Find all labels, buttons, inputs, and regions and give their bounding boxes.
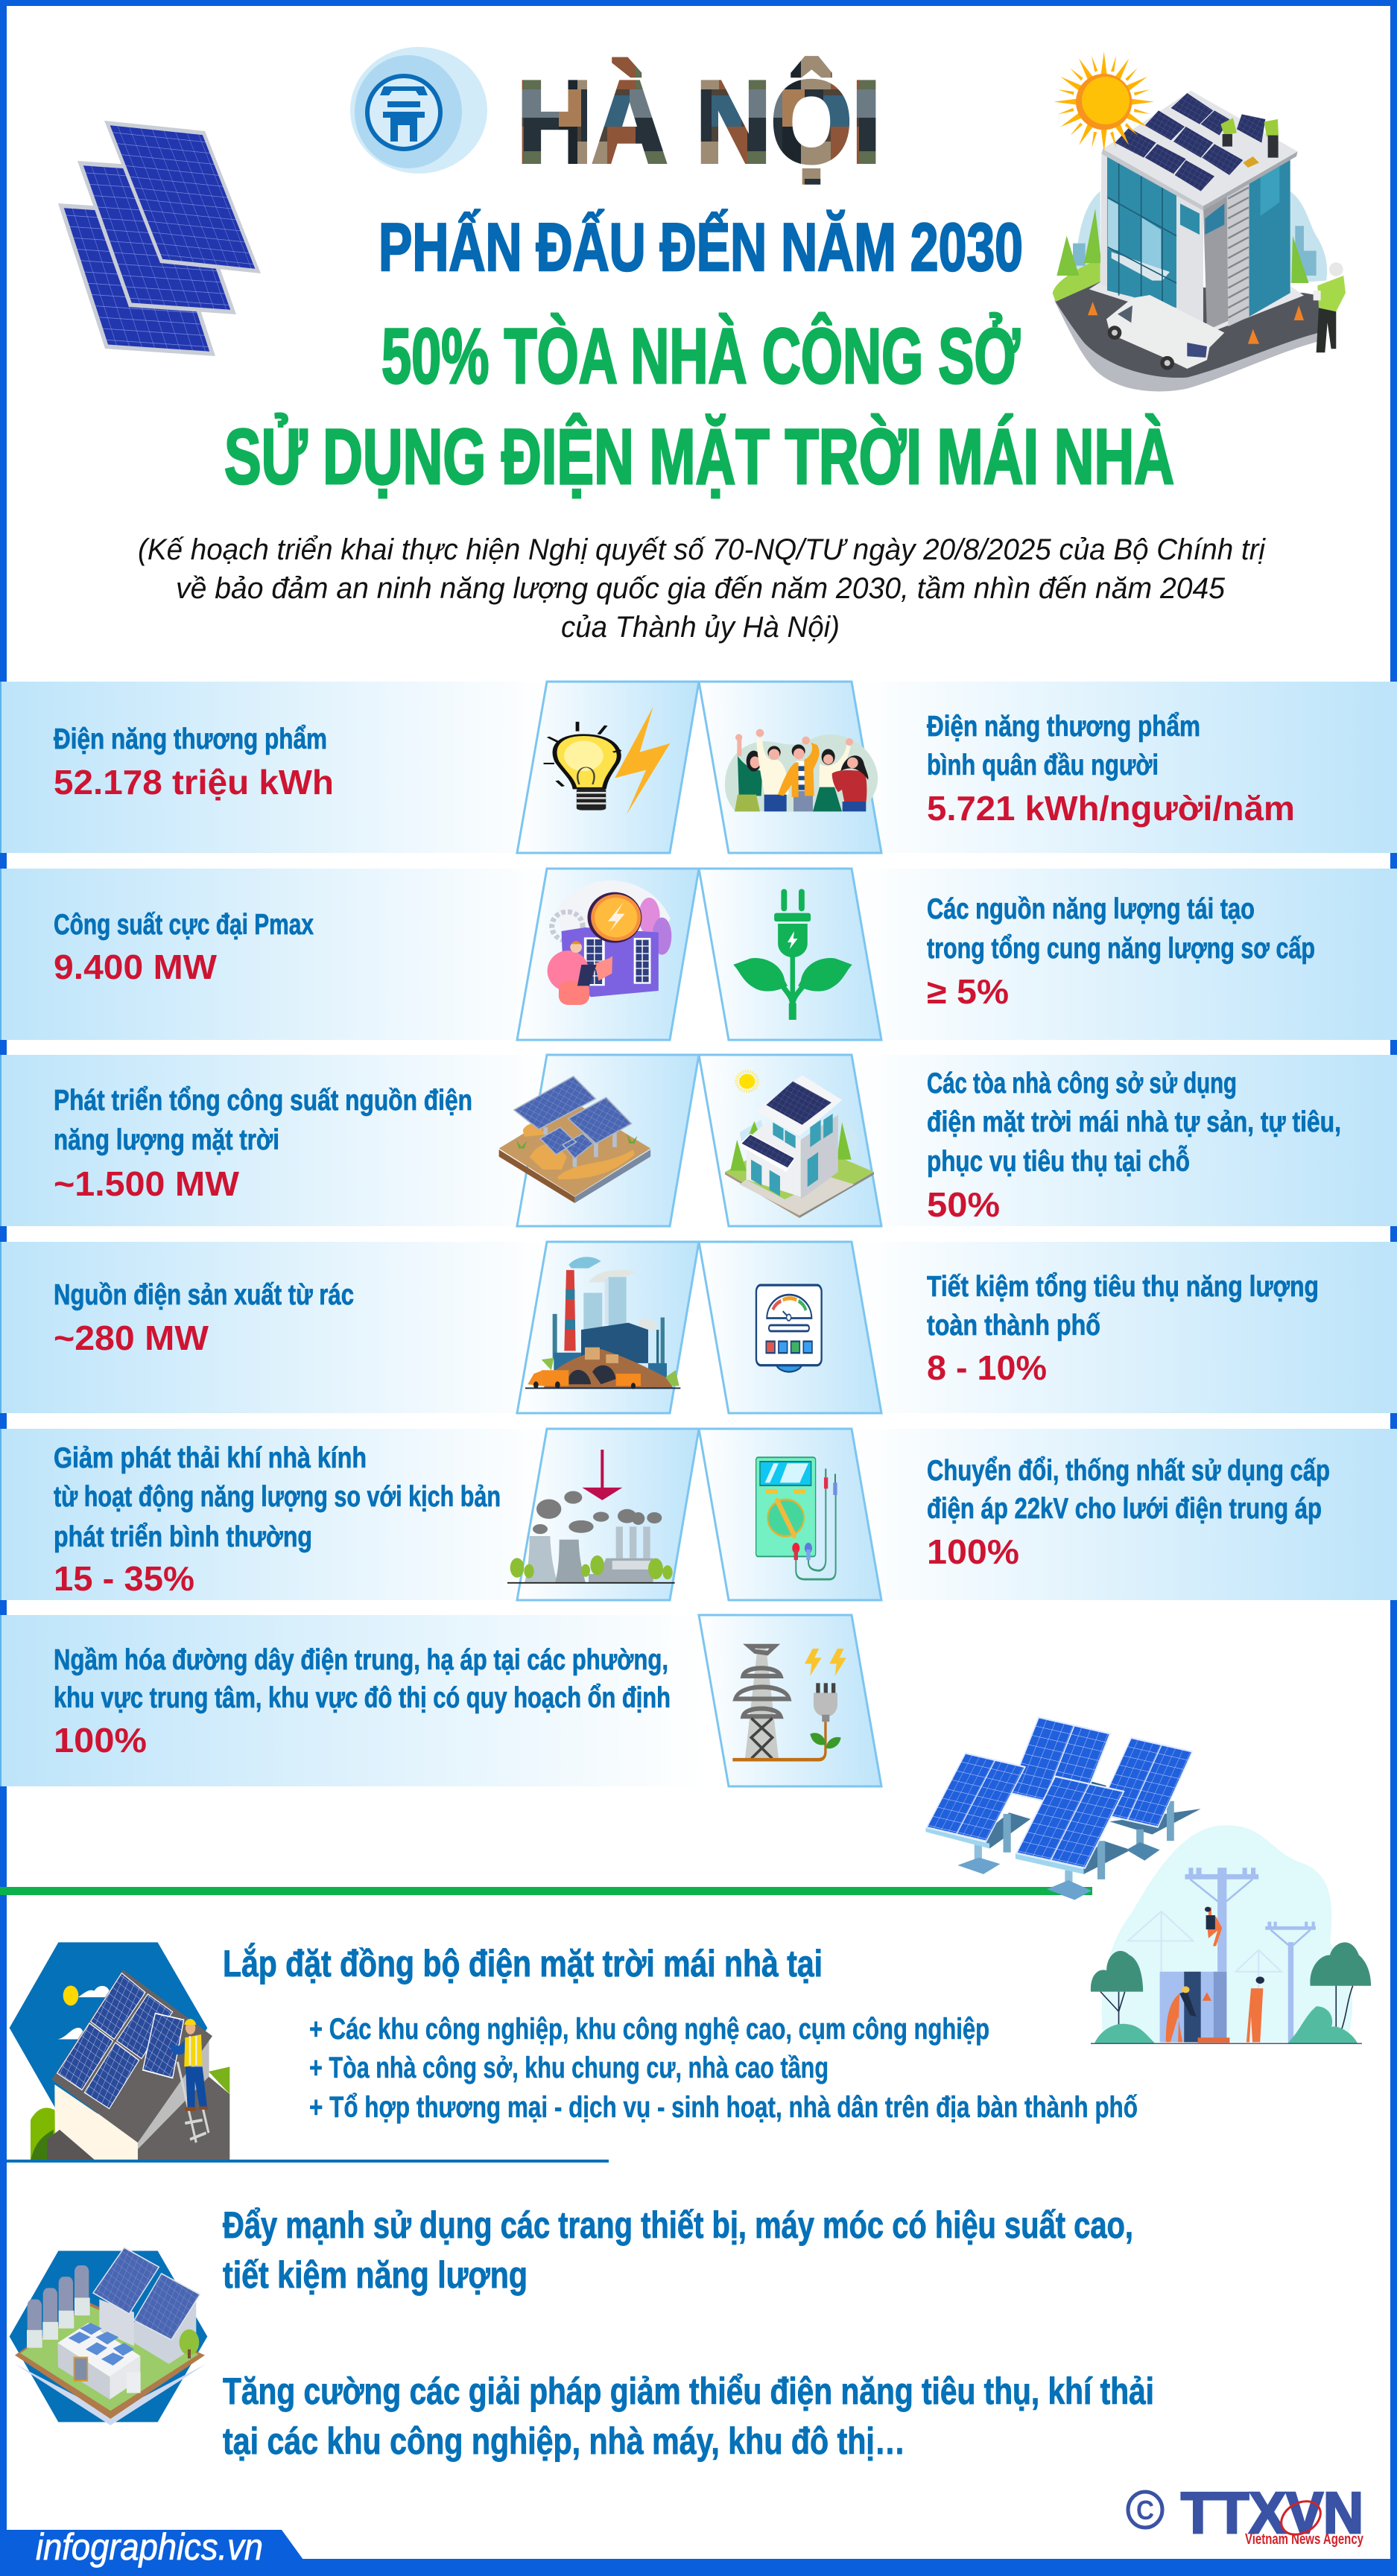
title: Hà Nội: HÀ NỘI [517, 57, 881, 186]
label: giảm phát thải khí nhà kính: 15 - 35% [54, 1559, 194, 1598]
block: đẩy mạnh sử dụng thiết bị: tiết kiệm năng lượng [223, 2254, 528, 2296]
row 6 icon panel [699, 1615, 881, 1786]
icon: solar farm on desert block [499, 1076, 650, 1203]
block: đẩy mạnh sử dụng thiết bị [223, 2204, 1133, 2296]
icon: light bulb and lightning [544, 706, 670, 815]
label: giảm phát thải khí nhà kính: Giảm phát thải khí nhà kính [54, 1442, 367, 1474]
row 2 right panel [699, 869, 1397, 1040]
label: tiết kiệm tổng tiêu thụ năng lượng: toàn thành phố [927, 1310, 1100, 1342]
icon: multimeter [756, 1457, 837, 1579]
label: tiết kiệm tổng tiêu thụ năng lượng: Tiết kiệm tổng tiêu thụ năng lượng [927, 1271, 1319, 1303]
van [1106, 295, 1224, 370]
block: lắp đặt đồng bộ: + Các khu công nghiệp, khu công nghệ cao, cụm công nghiệp [309, 2013, 989, 2046]
logo: TTXVN: TTXVN [1181, 2480, 1363, 2545]
icon: factory emissions with down arrow [507, 1450, 675, 1583]
cones [1088, 302, 1304, 344]
row 2 left panel [0, 869, 699, 1040]
left glass facade [1100, 151, 1203, 324]
block: lắp đặt đồng bộ: + Tòa nhà công sở, khu chung cư, nhà cao tầng [309, 2052, 829, 2084]
label: bình quân đầu người: Điện năng thương phẩm [927, 711, 1200, 743]
label: giảm phát thải khí nhà kính: phát triển bình thường [54, 1521, 312, 1553]
label: chuyển đổi cấp điện áp 22kV [927, 1455, 1330, 1571]
label: ngầm hóa đường dây: Ngầm hóa đường dây điện trung, hạ áp tại các phường, [54, 1644, 668, 1676]
sun [1054, 51, 1154, 152]
row 4 right panel [699, 1242, 1397, 1413]
icon: stacked solar panels [58, 121, 261, 356]
person 3 [778, 737, 820, 811]
label: phát triển nguồn điện mặt trời: năng lượng mặt trời [54, 1124, 279, 1156]
icon: Hanoi emblem [350, 47, 487, 174]
person 1 [735, 734, 762, 811]
label: phát triển nguồn điện mặt trời [54, 1085, 472, 1203]
logo: TTXVN: C [1136, 2495, 1154, 2525]
icon: group of people [725, 729, 878, 811]
label: bình quân đầu người [927, 711, 1295, 828]
subtitle text: về bảo đảm an ninh năng lượng quốc gia đến năm 2030, tầm nhìn đến năm 2045 [176, 572, 1226, 605]
block: lắp đặt đồng bộ: Lắp đặt đồng bộ điện mặt trời mái nhà tại [223, 1943, 823, 1985]
label: nguồn điện sản xuất từ rác [54, 1279, 354, 1357]
footer tab [0, 2530, 303, 2576]
label: ngầm hóa đường dây: khu vực trung tâm, khu vực đô thị có quy hoạch ổn định [54, 1682, 671, 1714]
label: điện năng thương phẩm [54, 723, 334, 802]
subtitle text [138, 533, 1266, 644]
row 6 left panel [0, 1615, 717, 1786]
label: tiết kiệm tổng tiêu thụ năng lượng: 8 - 10% [927, 1348, 1047, 1387]
section divider: blue [7, 2160, 609, 2163]
subtitle text: của Thành ủy Hà Nội) [561, 611, 840, 644]
label: nguồn năng lượng tái tạo [927, 893, 1315, 1011]
label: nguồn điện sản xuất từ rác: ~280 MW [54, 1319, 209, 1357]
row 1 left panel [0, 682, 699, 853]
row 4 left panel [0, 1242, 699, 1413]
footer label: infographics.vn: infographics.vn [36, 2526, 263, 2568]
label: ngầm hóa đường dây [54, 1644, 671, 1760]
row 3 right panel [699, 1055, 1397, 1226]
row 3 left panel [0, 1055, 699, 1226]
label: bình quân đầu người: 5.721 kWh/người/năm [927, 789, 1295, 828]
label: nguồn năng lượng tái tạo: ≥ 5% [927, 972, 1009, 1011]
row 5 right panel [699, 1429, 1397, 1600]
label: chuyển đổi cấp điện áp 22kV: 100% [927, 1532, 1019, 1571]
icon: worker installing rooftop panels [10, 1942, 229, 2161]
heading: 50% tòa nhà công sở: 50% TÒA NHÀ CÔNG SỞ [381, 312, 1020, 400]
subtitle text: (Kế hoạch triển khai thực hiện Nghị quyết số 70-NQ/TƯ ngày 20/8/2025 của Bộ Chính trị [138, 533, 1266, 566]
label: phát triển nguồn điện mặt trời: ~1.500 MW [54, 1164, 240, 1203]
label: công suất cực đại Pmax: 9.400 MW [54, 948, 218, 986]
icon: plug and plant [733, 889, 852, 1020]
label: tòa nhà công sở sử dụng điện mặt trời: 50% [927, 1185, 1000, 1224]
label: tòa nhà công sở sử dụng điện mặt trời [927, 1067, 1341, 1224]
block: đẩy mạnh sử dụng thiết bị: Đẩy mạnh sử dụng các trang thiết bị, máy móc có hiệu suất cao, [223, 2204, 1133, 2246]
label: tòa nhà công sở sử dụng điện mặt trời: phục vụ tiêu thụ tại chỗ [927, 1145, 1190, 1178]
right facade [1203, 158, 1290, 330]
engineer [1314, 262, 1346, 352]
icon: engineer with power building [548, 881, 671, 1005]
block: tăng cường giải pháp: Tăng cường các giải pháp giảm thiểu điện năng tiêu thụ, khí thải [223, 2370, 1154, 2412]
label: công suất cực đại Pmax [54, 909, 314, 986]
block: tăng cường giải pháp: tại các khu công nghiệp, nhà máy, khu đô thị… [223, 2420, 905, 2462]
icon: technicians at power pole [1091, 1825, 1371, 2043]
block: tăng cường giải pháp [223, 2370, 1154, 2462]
icon: house with rooftop solar [725, 1071, 874, 1218]
label: nguồn năng lượng tái tạo: Các nguồn năng lượng tái tạo [927, 893, 1255, 925]
label: giảm phát thải khí nhà kính: từ hoạt động năng lượng so với kịch bản [54, 1481, 501, 1513]
label: công suất cực đại Pmax: Công suất cực đại Pmax [54, 909, 314, 941]
person 4 [813, 738, 853, 811]
icon: smart solar campus [10, 2247, 207, 2426]
person 5 [832, 755, 868, 811]
heading: phấn đấu đến năm 2030: PHẤN ĐẤU ĐẾN NĂM 2030 [378, 209, 1023, 285]
block: lắp đặt đồng bộ [223, 1943, 1138, 2124]
icon: energy meter [756, 1285, 822, 1372]
label: phát triển nguồn điện mặt trời: Phát triển tổng công suất nguồn điện [54, 1085, 472, 1117]
icon: office building with rooftop solar [1053, 51, 1346, 391]
icon: solar panel array [925, 1716, 1201, 1900]
icon: pylon, bolts, plug and sprout [732, 1646, 846, 1760]
block: lắp đặt đồng bộ: + Tổ hợp thương mại - dịch vụ - sinh hoạt, nhà dân trên địa bàn thành phố [309, 2091, 1138, 2124]
label: giảm phát thải khí nhà kính [54, 1442, 501, 1598]
label: bình quân đầu người: bình quân đầu người [927, 749, 1159, 781]
row 1 right panel [699, 682, 1397, 853]
foot of solar array over divider [1047, 1880, 1092, 1900]
label: nguồn điện sản xuất từ rác: Nguồn điện sản xuất từ rác [54, 1279, 354, 1311]
roof with panels [1102, 91, 1298, 211]
label: ngầm hóa đường dây: 100% [54, 1721, 147, 1760]
icon: waste-to-energy factory [525, 1257, 680, 1389]
label: điện năng thương phẩm: Điện năng thương phẩm [54, 723, 327, 755]
section divider: green [0, 1887, 1092, 1895]
row 5 left panel [0, 1429, 699, 1600]
label: tiết kiệm tổng tiêu thụ năng lượng [927, 1271, 1319, 1387]
label: tòa nhà công sở sử dụng điện mặt trời: Các tòa nhà công sở sử dụng [927, 1067, 1237, 1100]
person 2 [756, 729, 789, 811]
label: điện năng thương phẩm: 52.178 triệu kWh [54, 763, 334, 802]
